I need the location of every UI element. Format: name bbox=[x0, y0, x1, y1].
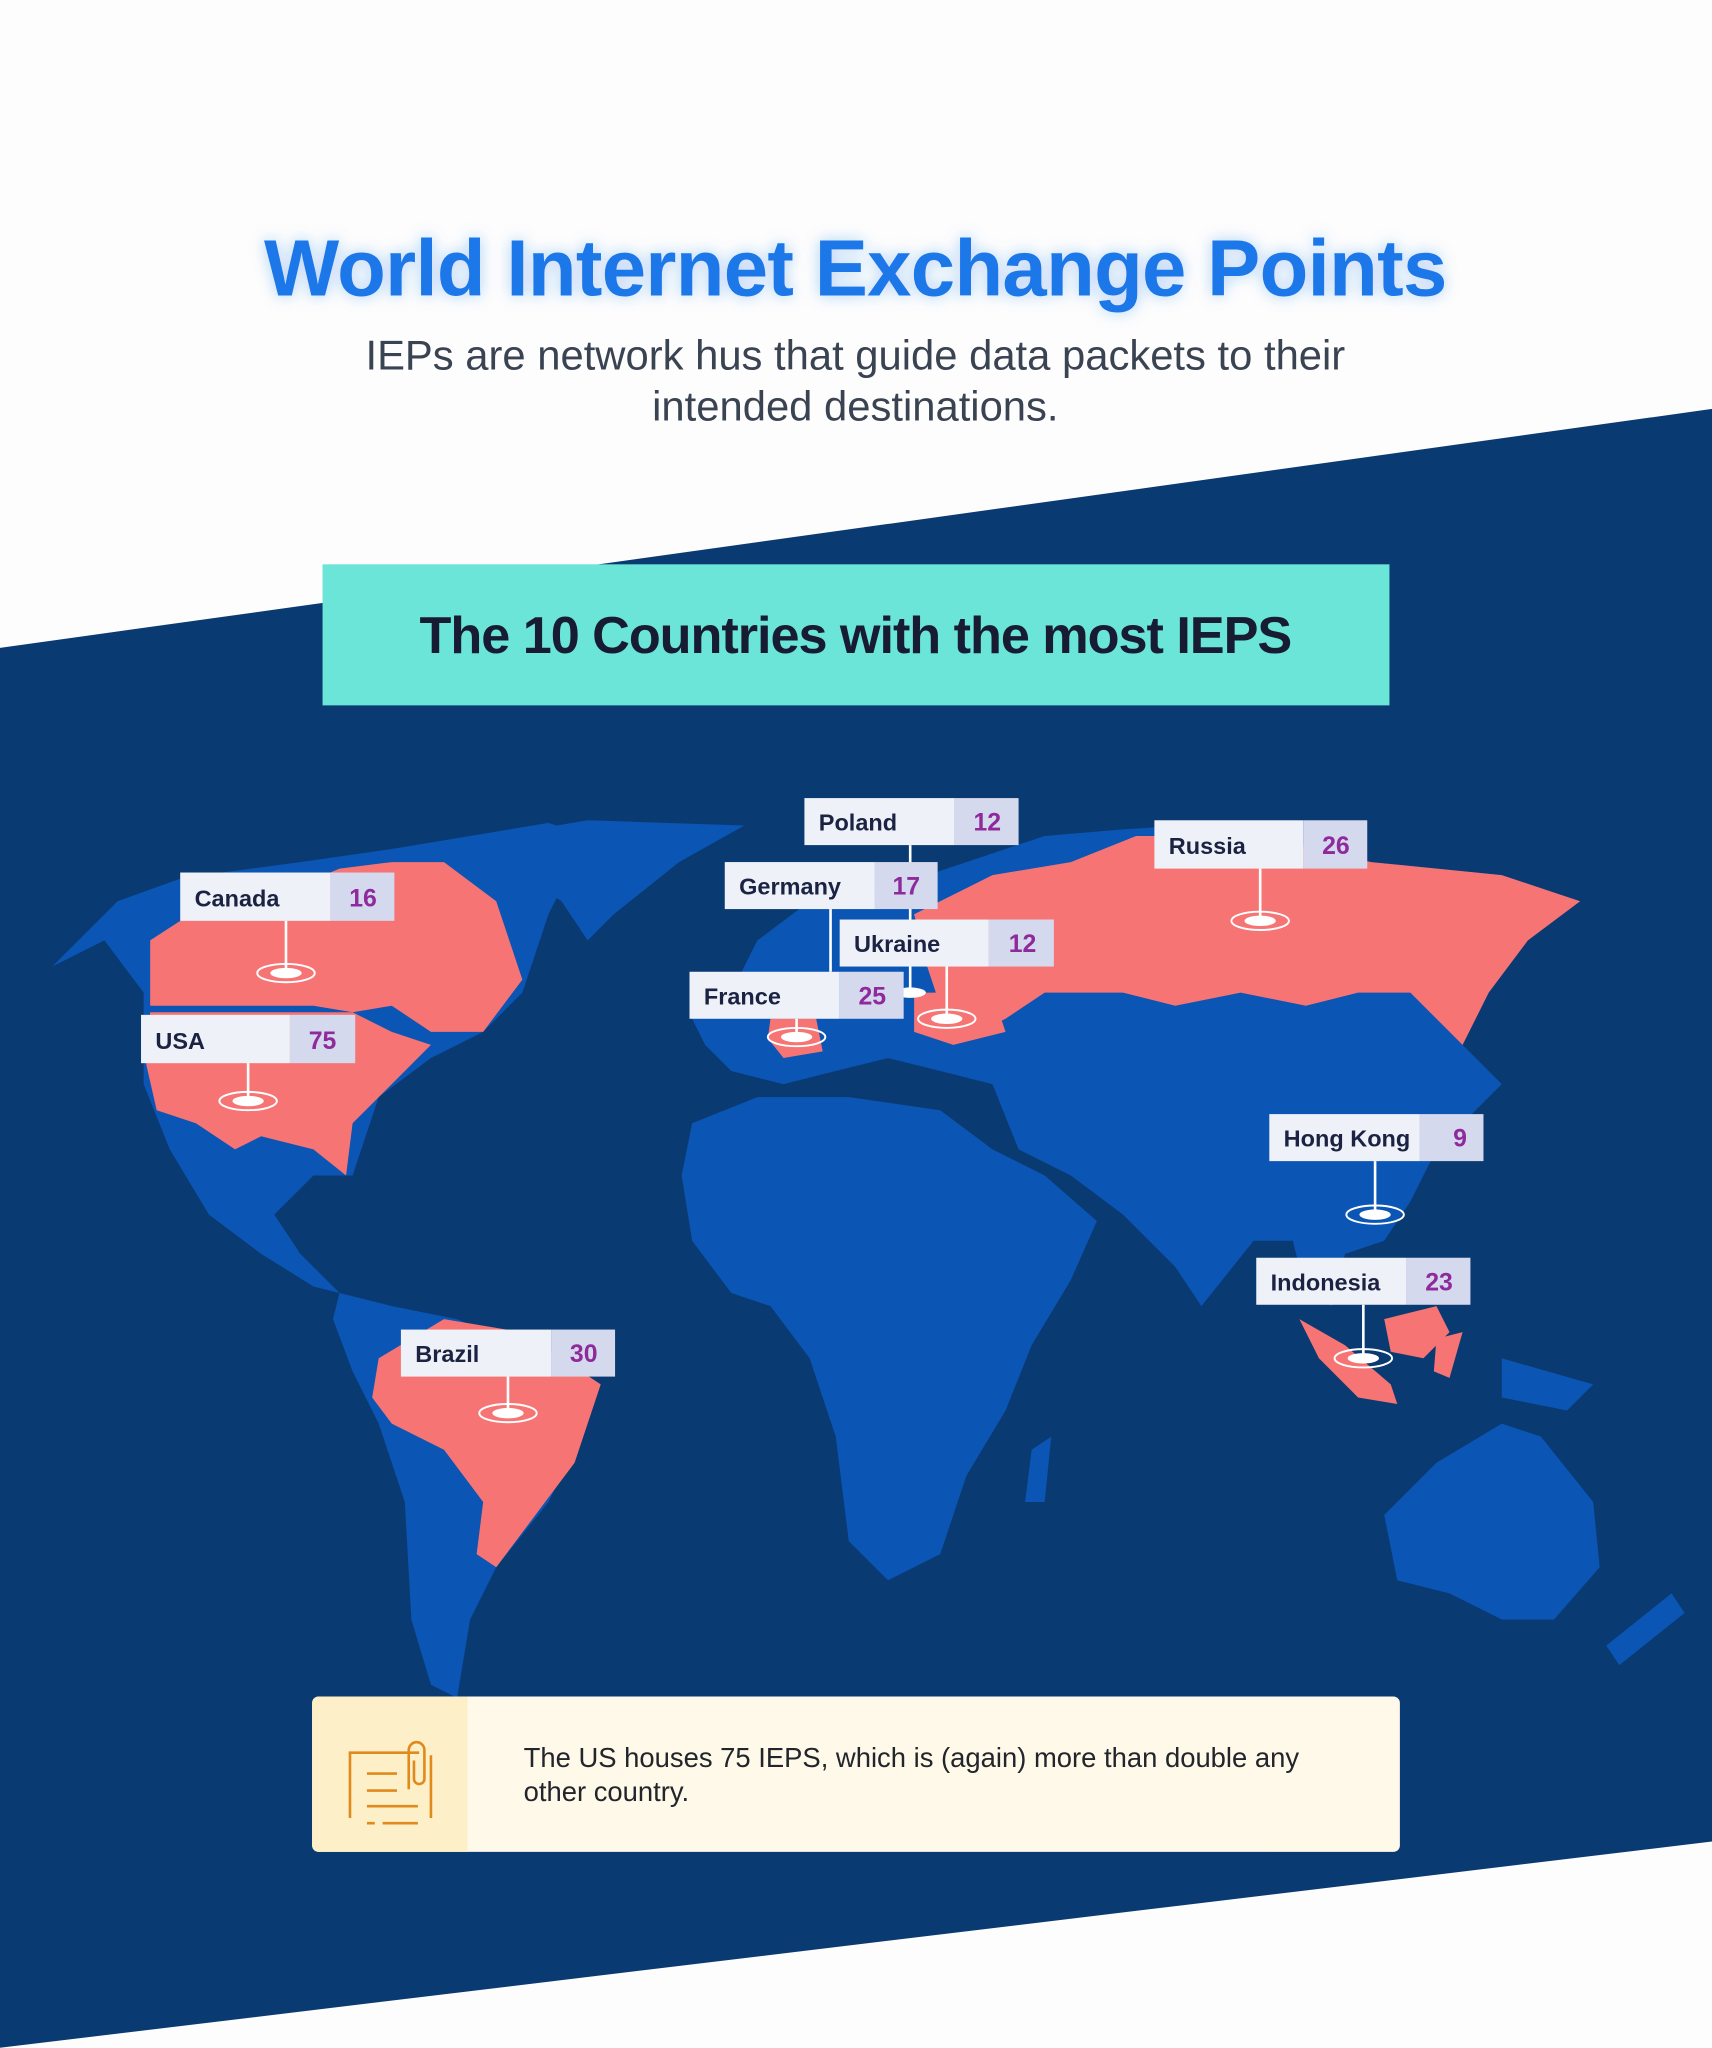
map: world bbox=[52, 820, 1685, 1698]
label: Hong Kong: 9 bbox=[1453, 1126, 1467, 1153]
label: Canada bbox=[180, 873, 394, 982]
label: Russia bbox=[1154, 820, 1367, 930]
label: Indonesia: 23 bbox=[1425, 1269, 1453, 1296]
label: USA: 75 bbox=[309, 1028, 337, 1055]
label: Hong Kong bbox=[1269, 1114, 1483, 1224]
label: Russia: Russia bbox=[1169, 833, 1247, 859]
callout bbox=[312, 1697, 1400, 1852]
label: Indonesia bbox=[1256, 1258, 1470, 1367]
subtitle: intended destinations. bbox=[652, 383, 1059, 430]
subtitle bbox=[365, 332, 1345, 430]
label: France: France bbox=[704, 983, 781, 1009]
icon: document with paperclip bbox=[350, 1742, 431, 1823]
heading banner: The 10 Countries with the most IEPS bbox=[420, 607, 1291, 665]
callout text: other country. bbox=[524, 1776, 689, 1807]
label: Indonesia: Indonesia bbox=[1271, 1269, 1381, 1295]
label: USA bbox=[141, 1015, 355, 1110]
label: Poland: 12 bbox=[973, 810, 1001, 837]
label: Brazil bbox=[401, 1330, 615, 1422]
label: France: 25 bbox=[859, 983, 886, 1010]
subtitle: IEPs are network hus that guide data packets to their bbox=[365, 332, 1345, 379]
label: Brazil: Brazil bbox=[415, 1341, 479, 1367]
title: World Internet Exchange Points bbox=[264, 223, 1447, 312]
label: Ukraine bbox=[840, 920, 1054, 1028]
callout text: The US houses 75 IEPS, which is (again) more than double any bbox=[524, 1742, 1299, 1773]
label: Ukraine: Ukraine bbox=[854, 931, 940, 957]
label: Hong Kong: Hong Kong bbox=[1284, 1126, 1410, 1152]
label: Canada: Canada bbox=[195, 885, 280, 911]
label: France bbox=[690, 972, 904, 1046]
label: Poland: Poland bbox=[819, 810, 897, 836]
label: Ukraine: 12 bbox=[1009, 931, 1036, 958]
label: Poland bbox=[804, 798, 1019, 998]
label: Germany bbox=[725, 862, 938, 972]
label: Canada: 16 bbox=[349, 885, 377, 912]
label: Germany: Germany bbox=[739, 874, 841, 900]
heading banner bbox=[323, 564, 1389, 705]
label: Germany: 17 bbox=[892, 874, 920, 901]
label: USA: USA bbox=[155, 1028, 205, 1054]
label: Brazil: 30 bbox=[570, 1341, 598, 1368]
label: Russia: 26 bbox=[1322, 833, 1350, 860]
callout text bbox=[524, 1742, 1299, 1807]
